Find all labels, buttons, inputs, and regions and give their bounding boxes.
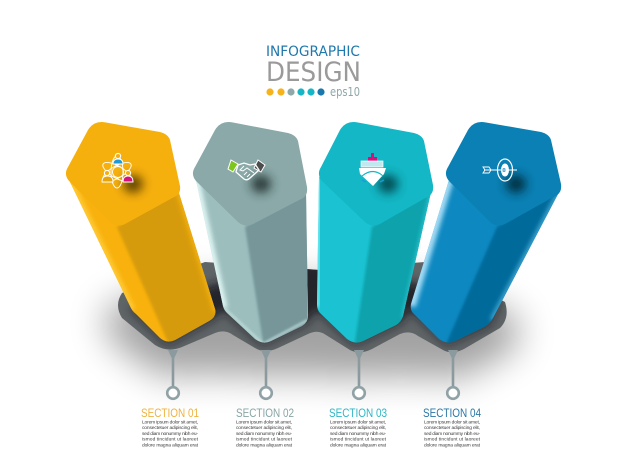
icon: ship [359, 153, 386, 186]
section 02 body: Lorem ipsum dolor sit amet, [236, 420, 292, 426]
connector 4 [447, 350, 459, 399]
section 01 body: ismod tincidunt ut laoreet [142, 437, 199, 443]
colored dots row [266, 88, 325, 96]
pillar 1 top shadow [123, 175, 143, 193]
section 02 body: dolore magna aliquam erat [236, 442, 293, 448]
section 02 body [236, 420, 293, 448]
section 02 body: ismod tincidunt ut laoreet [236, 437, 293, 443]
section 04 text [423, 408, 482, 448]
eps10 label: eps10 [330, 85, 360, 99]
pillar 1 top face [66, 122, 180, 226]
connector 2 [260, 350, 272, 399]
dark connector base with shadow [118, 260, 507, 352]
pillar 2 top shadow [251, 175, 271, 193]
section 04 body: ismod tincidunt ut laoreet [424, 437, 481, 443]
icon: people atom [100, 153, 134, 188]
section 02 text [236, 408, 294, 448]
section 03 body: sed diam nonummy nibh eu- [330, 431, 386, 437]
pillar 3 body [317, 176, 430, 343]
pillar 3 top shadow [378, 175, 398, 193]
section 04 body: Lorem ipsum dolor sit amet, [424, 420, 480, 426]
section 01 body: sed diam nonummy nibh eu- [142, 431, 198, 437]
section 04 body: consectetuer adipiscing elit, [424, 425, 480, 431]
section 04 heading: SECTION 04 [423, 408, 482, 420]
connector 1 [167, 350, 179, 399]
icon: handshake [228, 160, 265, 180]
infographic canvas [66, 46, 562, 448]
icon: target with arrow [483, 159, 517, 181]
section 02 body: consectetuer adipiscing elit, [236, 425, 292, 431]
section 01 body: dolore magna aliquam erat [142, 442, 199, 448]
section 01 body: Lorem ipsum dolor sit amet, [142, 420, 198, 426]
heading: design: DESIGN [266, 57, 361, 88]
section 02 heading: SECTION 02 [236, 408, 294, 420]
section 04 body: sed diam nonummy nibh eu- [424, 431, 480, 437]
section 03 body: dolore magna aliquam erat [330, 442, 387, 448]
pillar 2 top face [193, 122, 307, 226]
pillar 1: yellow [66, 122, 216, 342]
section 01 heading: SECTION 01 [141, 408, 199, 420]
section 03 body: ismod tincidunt ut laoreet [330, 437, 387, 443]
pillar 3: teal [317, 122, 434, 343]
section 03 text [329, 408, 387, 448]
pillar 1 body [70, 182, 216, 342]
pillar 4 top face [446, 122, 561, 226]
section 04 body: dolore magna aliquam erat [424, 442, 481, 448]
title block [266, 43, 361, 99]
section 03 body: Lorem ipsum dolor sit amet, [330, 420, 386, 426]
section 03 body [330, 420, 387, 448]
pillar 4 body [410, 180, 558, 343]
section 04 body [424, 420, 481, 448]
soft ground shadow [105, 282, 519, 379]
section 02 body: sed diam nonummy nibh eu- [236, 431, 292, 437]
section 01 body: consectetuer adipiscing elit, [142, 425, 198, 431]
connector 3 [353, 350, 365, 399]
section 01 body [142, 420, 199, 448]
heading: infographic: INFOGRAPHIC [266, 43, 360, 60]
pillar 2 body [196, 181, 308, 343]
pillar 2: grey-green [192, 122, 308, 343]
section 01 text [141, 408, 199, 448]
pillar 4 top shadow [506, 175, 526, 193]
section 03 body: consectetuer adipiscing elit, [330, 425, 386, 431]
section 03 heading: SECTION 03 [329, 408, 387, 420]
pillar 3 top face [319, 122, 433, 226]
pillar 4: blue [410, 122, 562, 343]
